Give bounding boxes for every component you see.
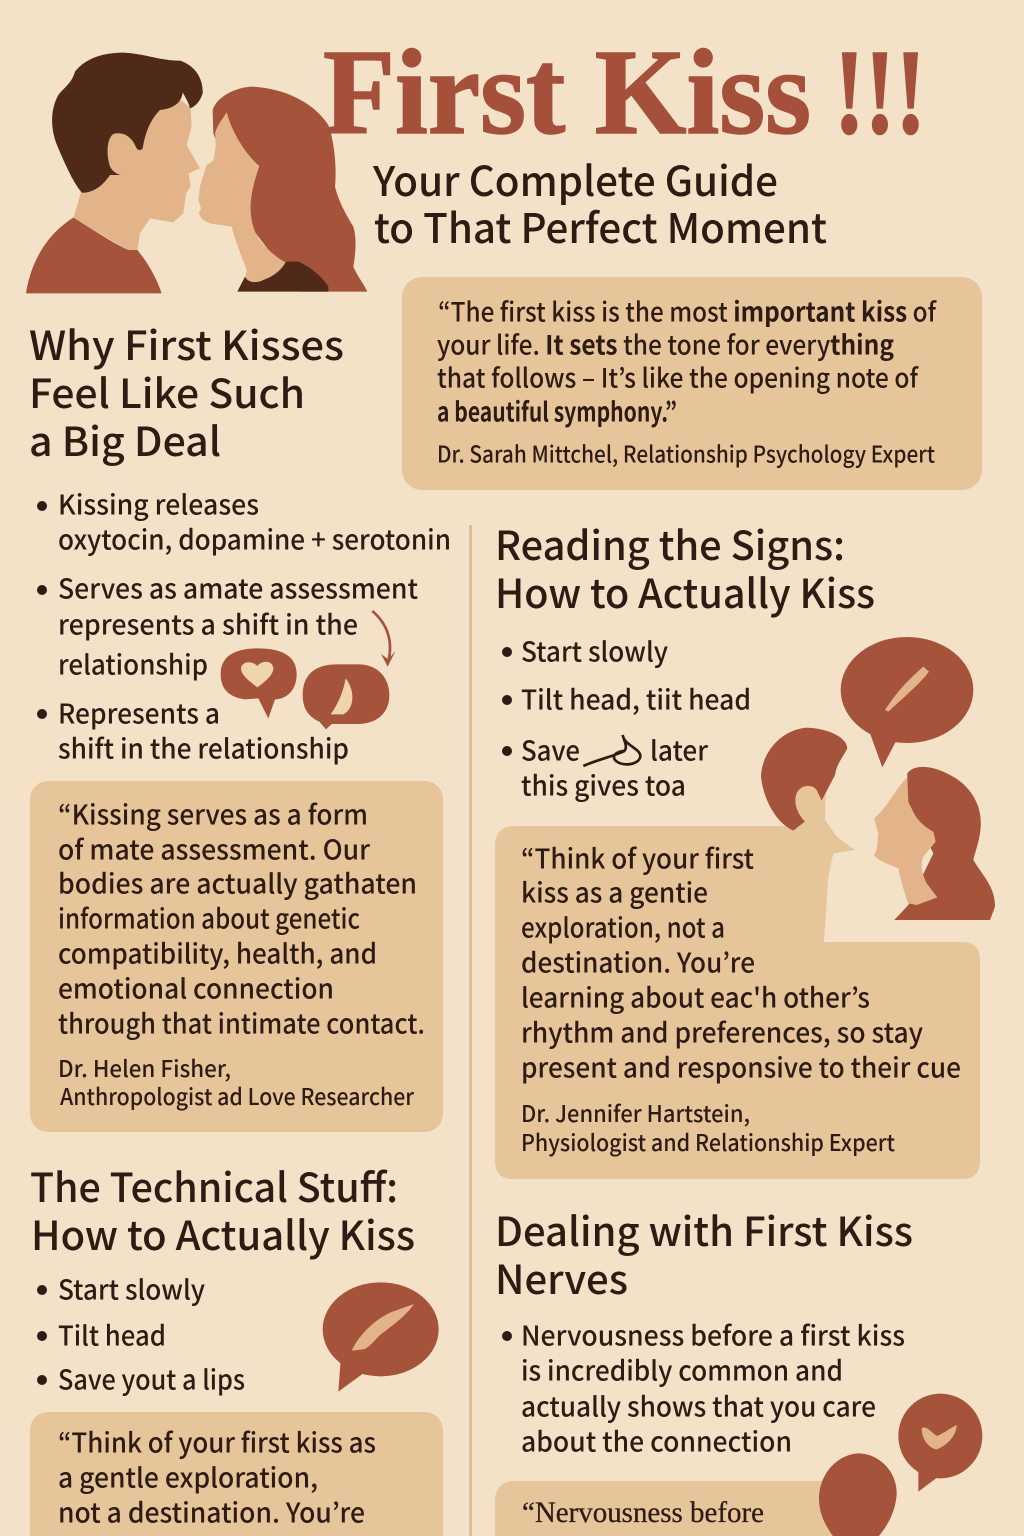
panel: Helen Fisher quote: of mate assessment. Our — [58, 828, 371, 868]
panel: gentle exploration quote: not a destination. You’re — [58, 1492, 365, 1530]
panel: gentle exploration quote — [30, 1412, 443, 1536]
illustration: couple with speech bubble — [761, 637, 995, 942]
panel: Helen Fisher quote: “Kissing serves as a form — [58, 794, 368, 832]
heading: why first kisses: a Big Deal — [29, 410, 221, 468]
divider — [469, 525, 472, 1536]
bullet list: reading the signs: Tilt head, tiit head — [521, 678, 751, 718]
panel: Helen Fisher quote: compatibility, health, and — [58, 932, 377, 972]
bullet list: reading the signs: later — [650, 730, 709, 768]
bullet list: technical stuff: Save yout a lips — [58, 1358, 245, 1398]
heading: the technical stuff: How to Actually Kiss — [31, 1204, 415, 1262]
panel: gentle exploration quote: “Think of your first kiss as — [58, 1422, 376, 1460]
bullet list: technical stuff — [37, 1268, 245, 1398]
panel: nervousness quote — [495, 1481, 875, 1536]
panel: Helen Fisher quote: information about genetic — [58, 898, 360, 936]
bullet list: nerves: actually shows that you care — [521, 1386, 876, 1424]
panel: expert quote Dr. Sarah Mittchel: that follows – It’s like the opening note of — [437, 356, 919, 396]
heading: why first kisses: Feel Like Such — [29, 362, 305, 420]
panel: Jennifer Hartstein quote: learning about eac'h other’s — [521, 976, 870, 1016]
panel: Jennifer Hartstein quote: rhythm and preferences, so stay — [521, 1012, 923, 1050]
panel: Helen Fisher quote: emotional connection — [58, 968, 334, 1006]
title: !!! — [834, 25, 926, 160]
bullet list: nerves: Nervousness before a first kiss — [521, 1314, 905, 1354]
panel: Helen Fisher quote: bodies are actually gathaten — [58, 862, 417, 902]
heading: dealing with nerves: Nerves — [495, 1248, 628, 1306]
panel: Jennifer Hartstein quote: exploration, not a — [521, 906, 725, 946]
heading: why first kisses — [29, 314, 344, 468]
bullet list: reading the signs: Start slowly — [521, 630, 668, 670]
heading: reading the signs — [495, 514, 875, 620]
subtitle: to That Perfect Moment — [374, 195, 827, 255]
panel: Helen Fisher quote: Dr. Helen Fisher, — [58, 1050, 231, 1084]
icon: speech bubbles with heart and arrow — [221, 611, 396, 729]
bullet list: why first kisses: Represents a — [58, 692, 220, 732]
bullet list: why first kisses: Serves as amate assessment — [58, 568, 418, 606]
heading: the technical stuff: The Technical Stuff: — [30, 1156, 398, 1214]
bullet list: why first kisses: oxytocin, dopamine + serotonin — [58, 518, 451, 558]
bullet list: why first kisses: relationship — [58, 644, 208, 682]
bullet list: why first kisses: shift in the relationship — [58, 728, 349, 766]
panel: expert quote Dr. Sarah Mittchel: a beautiful symphony.” — [437, 390, 677, 430]
bullet list: reading the signs: Save — [521, 730, 580, 768]
heading: reading the signs: Reading the Signs: — [495, 514, 845, 572]
bullet list: reading the signs: this gives toa — [521, 764, 686, 804]
illustration: couple about to kiss — [26, 53, 367, 293]
icon: speech bubble with leaf — [323, 1282, 439, 1392]
panel: expert quote Dr. Sarah Mittchel: “The first kiss is the most important kiss of — [438, 290, 937, 330]
bullet list: nerves: is incredibly common and — [521, 1350, 843, 1388]
bullet list: why first kisses: Kissing releases — [58, 484, 259, 522]
panel: expert quote Dr. Sarah Mittchel — [402, 277, 982, 490]
heading: reading the signs: How to Actually Kiss — [495, 562, 875, 620]
panel: expert quote Dr. Sarah Mittchel: Dr. Sarah Mittchel, Relationship Psychology Expert — [437, 436, 935, 470]
heading: the technical stuff — [30, 1156, 415, 1262]
subtitle — [372, 148, 827, 255]
panel: Jennifer Hartstein quote — [495, 826, 980, 1179]
panel: Helen Fisher quote — [30, 781, 443, 1132]
panel: nervousness quote: “Nervousness before — [522, 1496, 764, 1529]
panel: Jennifer Hartstein quote: “Think of your first — [521, 838, 754, 876]
panel: Jennifer Hartstein quote: Physiologist and Relationship Expert — [521, 1124, 895, 1158]
bullet list: nerves — [502, 1314, 905, 1460]
heading: why first kisses: Why First Kisses — [29, 314, 344, 372]
panel: Helen Fisher quote: Anthropologist ad Love Researcher — [60, 1078, 415, 1112]
heading: dealing with nerves — [495, 1200, 913, 1306]
bullet list: reading the signs — [502, 630, 751, 804]
panel: expert quote Dr. Sarah Mittchel: your life. It sets the tone for everything — [437, 324, 894, 362]
panel: Jennifer Hartstein quote: Dr. Jennifer Hartstein, — [521, 1095, 750, 1129]
icon: speech bubbles with check — [819, 1394, 982, 1536]
panel: Jennifer Hartstein quote: destination. You’re — [521, 942, 755, 980]
bullet list: why first kisses — [37, 484, 451, 766]
title: First Kiss — [323, 25, 811, 160]
bullet list: nerves: about the connection — [521, 1420, 792, 1460]
subtitle: Your Complete Guide — [372, 148, 778, 208]
bullet list: technical stuff: Tilt head — [58, 1314, 166, 1354]
panel: gentle exploration quote: a gentle exploration, — [58, 1456, 318, 1496]
panel: Jennifer Hartstein quote: present and responsive to their cue — [521, 1046, 961, 1086]
panel: Jennifer Hartstein quote: kiss as a gentie — [521, 872, 708, 910]
heading: dealing with nerves: Dealing with First Kiss — [495, 1200, 913, 1258]
panel: Helen Fisher quote: through that intimate contact. — [58, 1002, 425, 1042]
bullet list: why first kisses: represents a shift in the — [58, 604, 358, 642]
bullet list: technical stuff: Start slowly — [58, 1268, 205, 1308]
